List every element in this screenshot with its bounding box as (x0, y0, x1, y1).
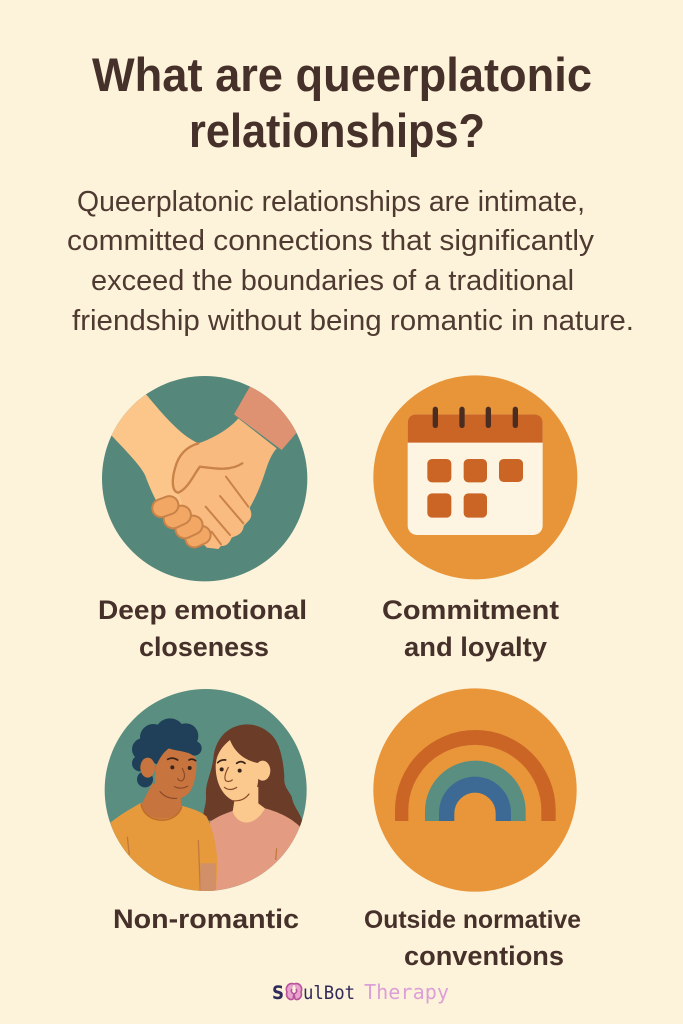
logo: SoulBot Therapy: Therapy (364, 980, 449, 1004)
logo: SoulBot Therapy (272, 980, 449, 1004)
icon: calendar (373, 375, 577, 579)
intro text block: Queerplatonic relationships are intimate, (77, 186, 585, 218)
logo: SoulBot Therapy: S (272, 982, 284, 1004)
icon: rainbow (373, 688, 577, 892)
title (92, 48, 592, 157)
intro text block: exceed the boundaries of a traditional (91, 265, 574, 297)
logo: SoulBot Therapy: ulBot (303, 982, 355, 1004)
label: outside normative conventions (364, 906, 581, 971)
title: What are queerplatonic (92, 48, 592, 101)
intro text block (67, 186, 634, 337)
label: deep emotional closeness (98, 595, 307, 662)
icon: two people (102, 689, 308, 900)
icon: handshake (100, 372, 317, 581)
label: outside normative conventions: Outside normative (364, 906, 581, 934)
label: deep emotional closeness: Deep emotional (98, 595, 307, 625)
label: outside normative conventions: conventions (404, 941, 564, 971)
label: commitment and loyalty: and loyalty (404, 632, 547, 662)
intro text block: friendship without being romantic in nature. (72, 305, 634, 337)
label: commitment and loyalty (382, 595, 559, 662)
intro text block: committed connections that significantly (67, 225, 595, 257)
label: commitment and loyalty: Commitment (382, 595, 559, 625)
label: non-romantic: Non-romantic (113, 904, 299, 934)
title: relationships? (189, 104, 485, 157)
label: deep emotional closeness: closeness (139, 632, 269, 662)
